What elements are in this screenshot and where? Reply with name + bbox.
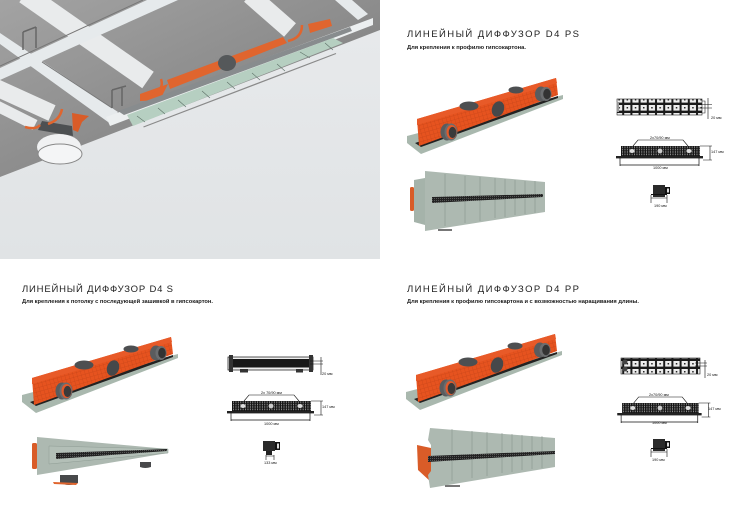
label length: 1000 мм xyxy=(264,422,279,426)
channel with rail xyxy=(106,18,373,126)
orange duct collars xyxy=(25,25,302,128)
concrete slab xyxy=(0,0,380,177)
top view drawing xyxy=(616,98,712,119)
label height: 147 мм xyxy=(708,407,721,411)
D4 PP underside view xyxy=(417,428,555,488)
photo: ceiling installation xyxy=(0,0,380,259)
front view drawing xyxy=(227,395,323,421)
lower left ducts xyxy=(0,87,73,136)
D4 S dimension drawings xyxy=(227,355,335,465)
round duct upper left xyxy=(25,0,148,80)
front view drawing xyxy=(616,140,712,166)
label length: 1000 мм xyxy=(653,166,668,170)
title: D4 PP: ЛИНЕЙНЫЙ ДИФФУЗОР D4 PP xyxy=(407,283,581,295)
hanger brackets xyxy=(23,27,126,108)
subtitle: D4 PP: Для крепления к профилю гипсокартона и с возможностью наращивания длины. xyxy=(407,298,640,305)
side view drawing xyxy=(651,439,670,457)
label width: 190 мм xyxy=(654,204,667,208)
D4 PP dimension drawings xyxy=(617,358,721,462)
label duct size: 2x70/90 мм xyxy=(649,393,669,397)
orange plenum in ceiling xyxy=(140,19,332,101)
round duct upper right xyxy=(250,0,290,30)
round ceiling diffuser xyxy=(37,134,82,164)
ceiling frame beams xyxy=(0,0,368,122)
D4 PS underside view xyxy=(410,171,545,231)
title: D4 PS: ЛИНЕЙНЫЙ ДИФФУЗОР D4 PS xyxy=(407,28,581,40)
side view drawing xyxy=(263,441,280,460)
green gypsum strip xyxy=(127,38,343,126)
top view drawing xyxy=(228,355,323,375)
label duct size: 2x70/90 мм xyxy=(650,136,670,140)
label height: 147 мм xyxy=(322,405,335,409)
label 20 mm: 20 мм xyxy=(707,373,718,377)
label width: 133 мм xyxy=(264,461,277,465)
D4 PS orange diffuser 3D view xyxy=(407,78,563,154)
label length: 1000 мм xyxy=(652,421,667,425)
linear slot xyxy=(144,54,336,127)
label height: 147 мм xyxy=(711,150,724,154)
orange duct bracket xyxy=(72,113,89,132)
D4 PP orange diffuser 3D view xyxy=(406,334,562,410)
top view drawing xyxy=(621,358,707,378)
label 20 mm: 20 мм xyxy=(322,372,333,376)
label 20 mm: 20 мм xyxy=(711,116,722,120)
subtitle: D4 S: Для крепления к потолку с последующей зашивкой в гипсокартон. xyxy=(22,298,214,305)
side view drawing xyxy=(651,185,670,203)
label width: 190 мм xyxy=(652,458,665,462)
title: D4 S: ЛИНЕЙНЫЙ ДИФФУЗОР D4 S xyxy=(22,283,175,295)
wall and ceiling board xyxy=(0,0,380,259)
D4 PS dimension drawings xyxy=(616,98,724,208)
D4 S underside view xyxy=(32,437,168,485)
label duct size: 2x 70/90 мм xyxy=(261,391,282,395)
subtitle: D4 PS: Для крепления к профилю гипсокартона. xyxy=(407,44,527,51)
front view drawing xyxy=(617,397,710,423)
D4 S orange diffuser 3D view xyxy=(22,337,178,413)
